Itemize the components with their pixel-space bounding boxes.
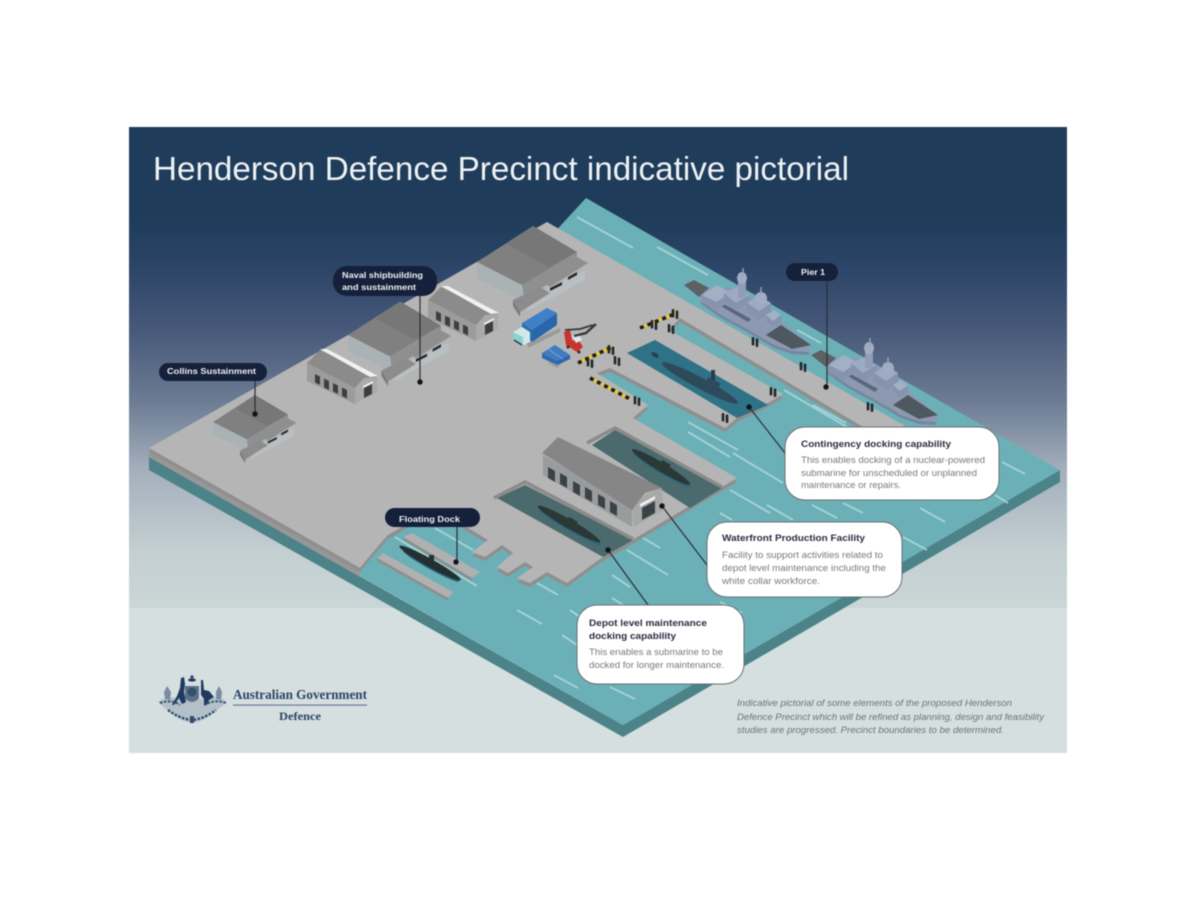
floating dock <box>377 533 480 601</box>
leader lines and markers <box>252 281 829 605</box>
label: Pier 1 <box>786 263 838 281</box>
water platform <box>149 198 1060 737</box>
callout: contingency docking capability <box>785 427 999 500</box>
callout: waterfront production facility <box>707 522 902 597</box>
label: Naval shipbuilding and sustainment: and sustainment <box>342 283 416 292</box>
building: waterfront production facility <box>542 437 663 527</box>
lower depot dock <box>494 482 633 557</box>
disclaimer note: studies are progressed. Precinct boundaries to be determined. <box>737 724 1004 735</box>
callout: depot level maintenance docking capability: docked for longer maintenance. <box>589 660 724 670</box>
ship: frigate one <box>684 268 811 355</box>
callout: waterfront production facility: Waterfront Production Facility <box>722 533 866 544</box>
building: shed north <box>428 286 499 341</box>
callout: contingency docking capability: maintenance or repairs. <box>801 480 901 490</box>
icon: Australian coat of arms <box>158 675 227 723</box>
disclaimer note: Indicative pictorial of some elements of the proposed Henderson <box>737 697 1012 708</box>
callout: depot level maintenance docking capability: This enables a submarine to be <box>589 647 723 657</box>
upper depot dock <box>587 428 722 508</box>
ship: frigate two <box>811 338 938 425</box>
disclaimer note: Defence Precinct which will be refined as planning, design and feasibility <box>737 711 1045 722</box>
label: Naval shipbuilding and sustainment <box>333 266 437 296</box>
logo wordmark: Australian Government Defence: Australian Government <box>233 687 368 702</box>
bollards <box>587 309 873 423</box>
panel: lower background band <box>129 608 1067 753</box>
label: Floating Dock: Floating Dock <box>399 514 460 524</box>
disclaimer note <box>737 697 1045 735</box>
land: precinct ground <box>149 222 905 587</box>
building: hangar north <box>477 226 588 317</box>
callout: contingency docking capability: This enables docking of a nuclear-powered <box>801 455 985 465</box>
callout: depot level maintenance docking capability <box>577 605 744 684</box>
callout: contingency docking capability: Contingency docking capability <box>801 439 952 450</box>
callout: depot level maintenance docking capability: docking capability <box>589 631 677 642</box>
label: Pier 1: Pier 1 <box>801 268 825 277</box>
contingency dock water <box>627 340 768 418</box>
safety barriers <box>578 313 677 399</box>
building: shed central <box>307 349 378 404</box>
logo wordmark: Australian Government Defence: Defence <box>279 711 321 723</box>
label: Floating Dock <box>385 508 480 527</box>
crane: red handler <box>564 324 596 354</box>
callout: waterfront production facility: depot level maintenance including the <box>722 563 886 573</box>
blue shipping containers <box>542 345 570 368</box>
submarine: contingency dock <box>651 351 741 408</box>
label: Naval shipbuilding and sustainment: Naval shipbuilding <box>342 271 423 280</box>
logo wordmark: Australian Government Defence <box>233 687 368 723</box>
panel: background gradient <box>129 127 1067 609</box>
callout: depot level maintenance docking capability: Depot level maintenance <box>589 618 707 629</box>
truck with blue container <box>513 308 560 348</box>
callout: waterfront production facility: Facility to support activities related to <box>722 550 883 560</box>
label: Collins Sustainment: Collins Sustainment <box>167 367 256 376</box>
building: hangar central <box>348 302 451 386</box>
label: Collins Sustainment <box>159 363 267 381</box>
building: Collins sustainment hangar <box>213 395 296 463</box>
title: Henderson Defence Precinct indicative pictorial <box>153 150 849 187</box>
callout: waterfront production facility: white collar workforce. <box>721 576 820 586</box>
callout: contingency docking capability: submarine for unscheduled or unplanned <box>801 468 977 478</box>
